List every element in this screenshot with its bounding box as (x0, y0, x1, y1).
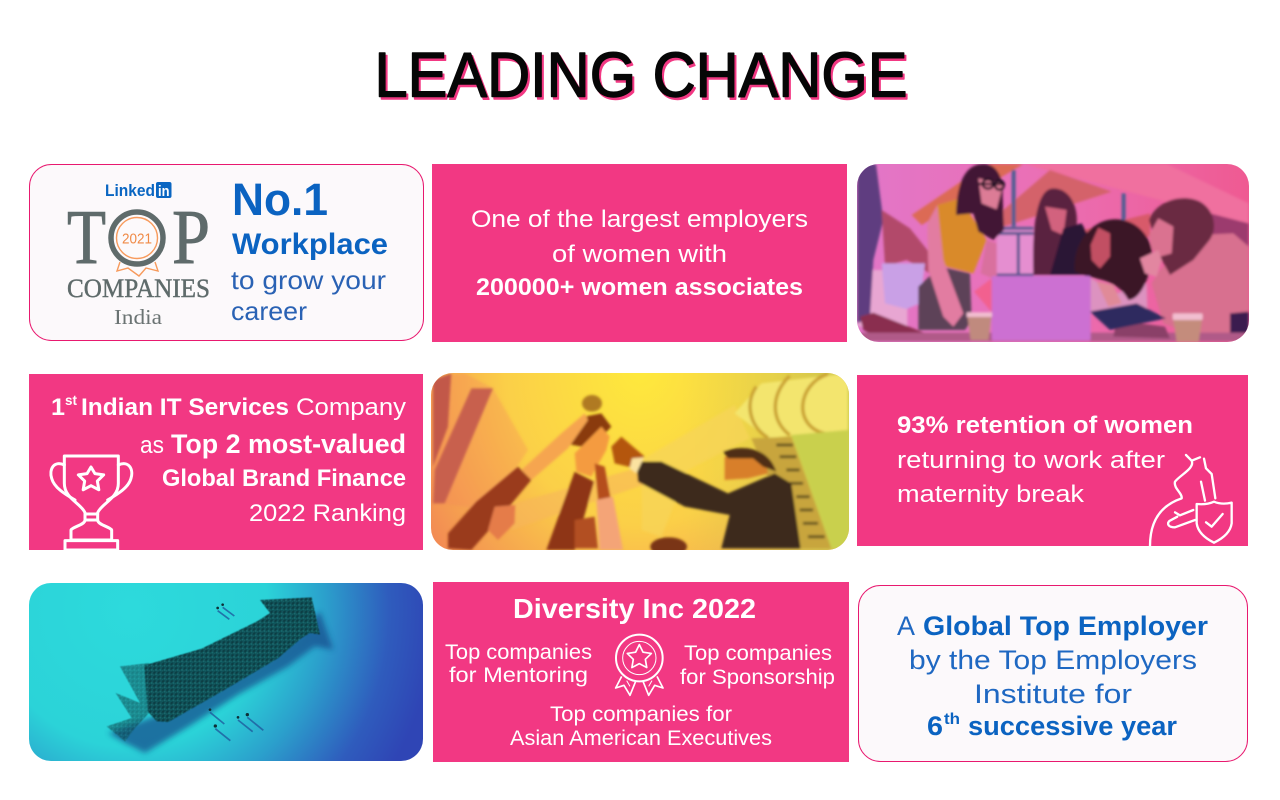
panel: Diversity Inc 2022: for Mentoring (449, 664, 588, 687)
panel: Global Top Employer: by the Top Employers (909, 645, 1197, 675)
panel: Indian IT services ranking: st (65, 392, 77, 408)
crowd arrow (144, 597, 320, 722)
person 1 (918, 267, 972, 330)
panel: Diversity Inc 2022: Diversity Inc 2022 (513, 593, 756, 624)
icon: pregnant woman with shield (1150, 455, 1232, 546)
panel: Diversity Inc 2022: for Sponsorship (680, 666, 835, 689)
icon: medal with star (616, 635, 663, 695)
logo: LinkedIn Top Companies 2021 India: 2021 (122, 232, 152, 248)
logo: LinkedIn Top Companies 2021 India: Linked (105, 181, 155, 200)
logo: LinkedIn Top Companies 2021 India: T (67, 194, 106, 280)
panel: retention after maternity break: returning to work after (897, 447, 1165, 474)
panel: largest employers of women: One of the largest employers (471, 206, 808, 233)
text: No.1 Workplace: No.1 (232, 174, 328, 225)
arrow shadow (108, 611, 333, 753)
logo: LinkedIn Top Companies 2021 India (67, 181, 210, 329)
left person (857, 164, 883, 323)
person 3 (1088, 277, 1147, 313)
panel: retention after maternity break: maternity break (897, 481, 1085, 508)
panel: Indian IT services ranking: 2022 Ranking (249, 500, 406, 527)
panel: retention after maternity break (857, 375, 1248, 546)
panel: Indian IT services ranking: as (140, 432, 164, 459)
panel: Diversity Inc 2022: Top companies (684, 642, 832, 665)
panel: Global Top Employer: Global Top Employer (923, 611, 1209, 641)
panel: Indian IT services ranking: Company (296, 394, 406, 421)
icon: trophy (51, 456, 132, 550)
panel: Indian IT services ranking: Global Brand Finance (162, 465, 406, 492)
panel: Global Top Employer: successive year (968, 711, 1177, 741)
text: No.1 Workplace (231, 174, 388, 326)
trophy (582, 395, 602, 412)
panel: Indian IT services ranking: Indian IT Services (81, 394, 289, 421)
table (857, 333, 1249, 341)
photo: women colleagues around a laptop (857, 164, 1249, 342)
logo: LinkedIn Top Companies 2021 India: in (158, 183, 170, 200)
panel: Global Top Employer: 6 (927, 711, 943, 741)
panel: Global Top Employer: th (944, 711, 960, 728)
panel: Global Top Employer: Institute for (974, 679, 1132, 709)
logo: LinkedIn Top Companies 2021 India: P (172, 194, 210, 280)
panel: Indian IT services ranking (29, 374, 423, 550)
panel: Global Top Employer: A (897, 611, 915, 641)
person 4 (1152, 233, 1249, 338)
logo: LinkedIn Top Companies 2021 India: COMPANIES (67, 274, 210, 303)
panel: Diversity Inc 2022 (433, 582, 849, 762)
panel: Indian IT services ranking: Top 2 most-valued (171, 429, 406, 459)
photo: team raising a trophy (431, 373, 849, 556)
sparse crowd tail (107, 663, 149, 741)
photo: crowd forming an upward arrow (29, 583, 423, 761)
raised arms (521, 413, 588, 480)
title: LEADING CHANGE (376, 43, 910, 113)
title: LEADING CHANGE (374, 40, 908, 110)
man (636, 462, 801, 548)
panel: largest employers of women: of women with (552, 241, 727, 268)
panel: largest employers of women: 200000+ women associates (476, 274, 803, 301)
panel: Indian IT services ranking: 1 (51, 394, 65, 421)
text: No.1 Workplace: Workplace (232, 228, 388, 261)
panel: Diversity Inc 2022: Asian American Executives (510, 727, 772, 750)
logo: LinkedIn Top Companies 2021 India: India (114, 305, 163, 329)
person 2 (1033, 188, 1077, 275)
text: No.1 Workplace: to grow your (231, 265, 386, 295)
panel: Diversity Inc 2022: Top companies (445, 641, 592, 664)
panel: largest employers of women (432, 164, 847, 342)
text: No.1 Workplace: career (231, 296, 307, 326)
panel: LinkedIn top companies (30, 164, 424, 340)
panel: Diversity Inc 2022: Top companies for (550, 703, 732, 726)
panel: Global Top Employer (858, 586, 1248, 762)
panel: retention after maternity break: 93% retention of women (897, 412, 1193, 439)
